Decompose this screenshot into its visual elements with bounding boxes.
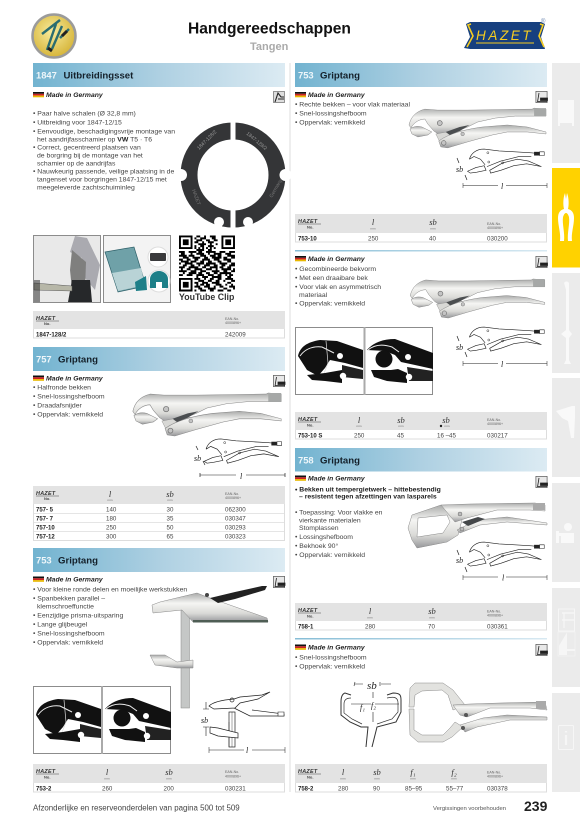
- diagram: dimensions: sb: [456, 556, 463, 565]
- feature list: • Lange glijbeugel: [33, 622, 88, 628]
- feature list: • Oppervlak: vernikkeld: [295, 300, 365, 308]
- table: 758-2: l: [342, 767, 345, 777]
- made in Germany: Made in Germany: [308, 92, 366, 99]
- diagram: dimensions: l: [501, 360, 504, 369]
- diagram: dimensions: l: [502, 574, 505, 582]
- diagram: dimensions: [456, 149, 547, 191]
- category emblem: [32, 14, 76, 58]
- HAZET logo: HAZET: [476, 28, 533, 43]
- feature list: • Eenzijdige prisma-uitsparing: [33, 612, 123, 620]
- diagram: dimensions: [456, 542, 547, 582]
- disclaimer: Vergissingen voorbehouden: [433, 806, 506, 812]
- panel: 757 Griptang: [33, 347, 285, 540]
- tab: screwdrivers: [552, 273, 580, 373]
- table: 758-1: 758-1: [298, 624, 314, 630]
- feature list: • Gecombineerde bekvorm: [295, 266, 376, 273]
- feature list: • Eenvoudige, beschadigingsvrije montage van: [33, 128, 175, 136]
- product photo: welding pliers: [408, 503, 547, 548]
- feature list: • Voor vlak en asymmetrisch: [295, 284, 381, 291]
- table: 758-1: mm: [368, 616, 373, 620]
- feature list: • Halfronde bekken: [33, 384, 91, 392]
- diagram: dimensions: l: [246, 746, 249, 755]
- product image: split ring: [175, 120, 292, 230]
- section rule: [295, 638, 547, 640]
- diagram: jaws: [296, 327, 433, 395]
- feature list: • Rechte bekken – voor vlak materiaal: [295, 102, 410, 108]
- feature list: • Spanbekken parallel –: [33, 596, 105, 602]
- table: 753-10 S: mm: [444, 424, 450, 428]
- made in Germany: Made in Germany: [308, 644, 366, 652]
- QR code: [179, 236, 235, 302]
- table: 758-2: No.: [307, 774, 313, 780]
- icon: lever: [536, 644, 548, 656]
- table: 757: EAN-No.: [225, 492, 239, 496]
- table: 757: 50: [166, 524, 174, 532]
- table: 757: l: [109, 489, 112, 499]
- table: 753-2: 260: [102, 786, 113, 792]
- table: 753-10 S: mm: [398, 424, 404, 428]
- feature list: • Oppervlak: vernikkeld: [295, 120, 365, 126]
- tab: equipment: [552, 588, 580, 687]
- bold feature: – resistent tegen afzettingen van lasparels: [299, 494, 437, 500]
- table: 757: 250: [106, 524, 117, 532]
- diagram: dimensions: sb: [201, 716, 208, 725]
- table: 757: 030347: [225, 516, 246, 522]
- table: 753-10: 250: [368, 236, 379, 242]
- table: 758-2: 758-2: [298, 786, 314, 792]
- table: 757: 062300: [225, 506, 246, 514]
- table: 753-10: 4000896+: [487, 226, 503, 230]
- diagram: dimensions: [456, 327, 547, 369]
- table: 757: 35: [166, 516, 174, 522]
- table: 1847: 242009: [225, 332, 246, 338]
- diagram: dimensions: sb: [456, 165, 463, 174]
- heading: 757: Griptang: [58, 354, 98, 366]
- table: 758-2: 85–95: [405, 786, 423, 792]
- heading: 753: [33, 548, 285, 572]
- diagram: dimensions: sb: [456, 343, 463, 352]
- table: 753-10 S: sb: [442, 415, 450, 425]
- photo: case set: [104, 236, 170, 302]
- table: 758-1: EAN-No.: [487, 610, 501, 614]
- feature list: • Oppervlak: vernikkeld: [33, 640, 103, 646]
- table: 758-2: HAZET: [298, 769, 318, 775]
- table: 753-10: HAZET: [298, 219, 318, 225]
- table: 758-1: No.: [307, 614, 313, 618]
- table: 753-10 S: sb: [397, 415, 405, 425]
- feature list: • Oppervlak: vernikkeld: [295, 552, 365, 559]
- table: 753-10: l: [372, 217, 375, 227]
- table: 753-10: 030200: [487, 236, 508, 242]
- table: 758-1: l: [369, 606, 372, 616]
- table: 758-1: sb: [428, 606, 436, 616]
- table: 753-10: 753-10: [298, 236, 317, 242]
- icon: lever: [273, 375, 285, 387]
- feature list: • Voor kleine ronde delen en moeilijke werkstukken: [33, 586, 187, 594]
- table: 753-10: [295, 214, 547, 242]
- table: 753-2: 200: [164, 786, 174, 792]
- table: 757: No.: [44, 496, 50, 501]
- diagram: C-clamp dimensions: [341, 680, 401, 747]
- table: 753-10 S: EAN-No.: [487, 418, 501, 422]
- feature list: • Snel-lossingshefboom: [295, 110, 367, 118]
- feature list: • Snel-lossingshefboom: [33, 630, 105, 638]
- table: 758-2: 280: [338, 786, 349, 792]
- diagram: dimensions: [194, 439, 285, 481]
- table: 757: 140: [106, 506, 117, 514]
- feature list: klemschroeffunctie: [37, 604, 94, 610]
- feature list: • Nauwkeurig passende, veilige plaatsing in de: [33, 168, 174, 176]
- column divider: [289, 63, 291, 792]
- panel: 758 Griptang: [295, 448, 548, 630]
- diagram: dimensions: [201, 692, 285, 755]
- panel: 753 Griptang left: [33, 548, 285, 792]
- made in Germany: Made in Germany: [308, 476, 366, 482]
- table: 753-10 S: 030217: [487, 432, 508, 440]
- table: 753-2: mm: [166, 776, 172, 780]
- table: 758-2: 90: [373, 786, 380, 792]
- table: 757: 65: [166, 534, 174, 540]
- table: 753-10 S: HAZET: [298, 417, 318, 423]
- product image: split ring: 1847-128/2: [245, 131, 268, 152]
- HAZET logo: [464, 18, 546, 49]
- diagram: C-clamp dimensions: sb: [367, 680, 377, 692]
- table: 753-2: mm: [104, 776, 110, 780]
- table: 753-10: mm: [370, 226, 376, 230]
- heading: 753: [295, 63, 547, 87]
- feature list: • Snel-lossingshefboom: [33, 394, 105, 400]
- feature list: tangenset voor borgringen 1847-12/15 met: [37, 176, 167, 184]
- table: 758-1: 4000896+: [487, 614, 503, 618]
- table: 753-10: sb: [429, 217, 437, 227]
- feature list: schamier op de aandrijfas: [37, 160, 116, 168]
- table: 1847: No.: [44, 321, 50, 326]
- table: 753-2: l: [106, 767, 109, 777]
- table: 753-2: [33, 764, 285, 792]
- table: 757: 030323: [225, 534, 246, 540]
- icon: tool symbol: [274, 92, 284, 102]
- table: 758-1: [295, 603, 547, 630]
- table: 758-1: 280: [365, 624, 376, 630]
- table: 1847: HAZET: [36, 316, 56, 322]
- title: Handgereedschappen: [188, 20, 351, 38]
- icon: lever: [536, 476, 548, 488]
- table: 757: 757- 7: [36, 516, 54, 522]
- subtitle: Tangen: [250, 41, 289, 53]
- table: 758-2: [295, 764, 547, 792]
- table: 753-10: 40: [429, 236, 436, 242]
- table: 757: 30: [166, 506, 174, 514]
- table: 753-10 S: 250: [354, 432, 365, 440]
- feature list: • Met een draaibare bek: [295, 275, 368, 282]
- table: 753-10: EAN-No.: [487, 222, 501, 226]
- made in Germany: Made in Germany: [46, 376, 104, 382]
- table: 758-1: HAZET: [298, 608, 318, 614]
- tab: power tools: [552, 378, 580, 477]
- product image: split ring: Germany: [269, 178, 284, 199]
- table: 753-2: EAN-No.: [225, 770, 239, 774]
- bold feature: • Bekken uit tempergietwerk – hittebestendig: [295, 486, 441, 494]
- HAZET logo: ®: [541, 18, 546, 25]
- product photo: sliding clamp: [150, 586, 268, 708]
- table: 758-2: f₂: [451, 767, 457, 777]
- heading: 757: [33, 347, 285, 371]
- table: 757: [33, 486, 285, 540]
- table: 753-2: No.: [44, 774, 50, 780]
- feature list: • Snel-lossingshefboom: [295, 654, 367, 662]
- diagram: jaws: [34, 686, 171, 754]
- table: 757: 4000896+: [225, 496, 241, 500]
- table: 1847: 1847-128/2: [36, 332, 67, 338]
- panel: 753-10 S: [295, 250, 548, 440]
- table: 753-2: HAZET: [36, 769, 56, 775]
- feature list: Stomplassen: [299, 525, 339, 532]
- table: 758-2: mm: [452, 776, 457, 780]
- table: 758-2: f₁: [410, 767, 416, 777]
- photo: assembly in use: [34, 236, 100, 302]
- table: 757: 757-10: [36, 526, 55, 532]
- table: 753-10: No.: [307, 224, 313, 230]
- icon: lever: [536, 256, 548, 268]
- table: 753-10: mm: [430, 226, 436, 230]
- table: 1847: 4000896+: [225, 321, 241, 325]
- heading: 753: 753: [36, 554, 52, 566]
- panel: 758-2: [295, 638, 548, 792]
- table: 753-10 S: [295, 412, 547, 440]
- product photo: C-clamp pliers: [409, 683, 547, 742]
- table: 758-2: mm: [340, 776, 346, 780]
- diagram: C-clamp dimensions: f₂: [371, 701, 376, 710]
- table: 753-10 S: l: [358, 415, 361, 425]
- feature list: • Lossingshefboom: [295, 534, 353, 541]
- section rule: [295, 250, 547, 252]
- table: 758-1: mm: [430, 616, 435, 620]
- product photo: pliers: [409, 108, 546, 148]
- table: 753-10 S: No.: [307, 422, 313, 428]
- table: 753-10 S: 16 –45: [437, 432, 456, 440]
- heading: 1847: 1847: [36, 70, 57, 80]
- made in Germany: Made in Germany: [46, 576, 104, 584]
- diagram: dimensions: l: [240, 472, 243, 481]
- sidebar tabs: [552, 63, 580, 792]
- icon: lever: [536, 91, 548, 103]
- feature list: • Correct, gecentreerd plaatsen van: [33, 144, 141, 152]
- tab: information: [552, 693, 580, 792]
- feature list: • Oppervlak: vernikkeld: [295, 664, 365, 670]
- table: 757: 030293: [225, 524, 246, 532]
- table: 1847: [33, 311, 285, 338]
- diagram: C-clamp dimensions: f₁: [360, 703, 365, 712]
- table: 758-2: 4000896+: [487, 774, 503, 778]
- panel: 753 Griptang right: [295, 63, 548, 242]
- table: 757: 300: [106, 534, 117, 540]
- table: 758-2: EAN-No.: [487, 770, 501, 774]
- diagram: dimensions: l: [501, 182, 504, 191]
- table: 757: HAZET: [36, 491, 56, 497]
- feature list: vierkante materialen: [299, 518, 361, 524]
- table: 758-1: 030361: [487, 624, 508, 630]
- heading: 753: Griptang: [58, 556, 98, 566]
- product photo: pliers: [133, 393, 281, 436]
- table: 757: mm: [108, 498, 113, 502]
- icon: lever: [273, 576, 285, 588]
- feature list: • Uitbreiding voor 1847-12/15: [33, 120, 122, 126]
- feature list: • Bekhoek 90°: [295, 542, 338, 550]
- table: 757: mm: [168, 498, 173, 502]
- feature list: meegeleverde zachtschuiminleg: [37, 184, 135, 192]
- product image: split ring: HAZET: [190, 189, 201, 206]
- feature list: materiaal: [299, 292, 328, 299]
- heading: 1847: Uitbreidingsset: [64, 70, 134, 82]
- heading: 757: 757: [36, 354, 52, 364]
- table: 753-2: sb: [165, 767, 173, 777]
- heading: 753: Griptang: [320, 70, 360, 82]
- table: 753-10 S: mm: [356, 424, 362, 428]
- page number: 239: [524, 798, 548, 814]
- feature list: • Oppervlak: vernikkeld: [33, 412, 103, 418]
- made in Germany: Made in Germany: [46, 92, 104, 99]
- table: 753-10 S: 4000896+: [487, 422, 503, 426]
- table: 758-2: mm: [410, 776, 416, 780]
- table: 757: 757- 5: [36, 508, 54, 514]
- panel: 1847 Uitbreidingsset: [33, 63, 292, 338]
- table: 758-2: sb: [373, 767, 381, 777]
- table: 753-10 S: 753-10 S: [298, 434, 322, 440]
- table: 758-2: 030378: [487, 786, 508, 792]
- feature list: • Draadafsnijder: [33, 402, 83, 410]
- feature list: de borgring bij de montage van het: [37, 152, 143, 160]
- product photo: pliers: [410, 279, 545, 318]
- heading: 753: 753: [298, 70, 314, 80]
- table: 1847: EAN-No.: [225, 317, 239, 321]
- table: 757: 180: [106, 516, 117, 522]
- tab: pliers active: [552, 168, 580, 268]
- table: 758-1: 70: [428, 624, 435, 630]
- product image: split ring: 1847-128/2: [196, 129, 218, 151]
- table: 757: sb: [166, 489, 174, 499]
- feature list: • Paar halve schalen (Ø 32,8 mm): [33, 110, 136, 118]
- table: 758-2: mm: [374, 776, 380, 780]
- feature list: het aandrijfasschamier op VW T5 · T6: [37, 136, 152, 144]
- table: 753-2: 753-2: [36, 786, 52, 792]
- table: 758-2: 55–77: [446, 786, 464, 792]
- table: 757: 757-12: [36, 534, 55, 540]
- table: 753-2: 030231: [225, 786, 246, 792]
- heading: 1847: [33, 63, 285, 87]
- table: 753-2: 4000896+: [225, 774, 241, 778]
- footer note: Afzonderlijke en reserveonderdelen van pagina 500 tot 509: [33, 804, 240, 812]
- heading: 758: Griptang: [320, 456, 360, 466]
- diagram: dimensions: sb: [194, 454, 201, 463]
- QR caption: YouTube Clip: [179, 292, 235, 302]
- tab: workshop: [552, 483, 580, 582]
- heading: 758: [295, 448, 547, 472]
- heading: 758: 758: [298, 454, 314, 466]
- made in Germany: Made in Germany: [308, 256, 366, 263]
- table: 753-10 S: 45: [397, 432, 404, 440]
- tab: storage: [552, 63, 580, 163]
- feature list: • Toepassing: Voor vlakke en: [295, 510, 383, 516]
